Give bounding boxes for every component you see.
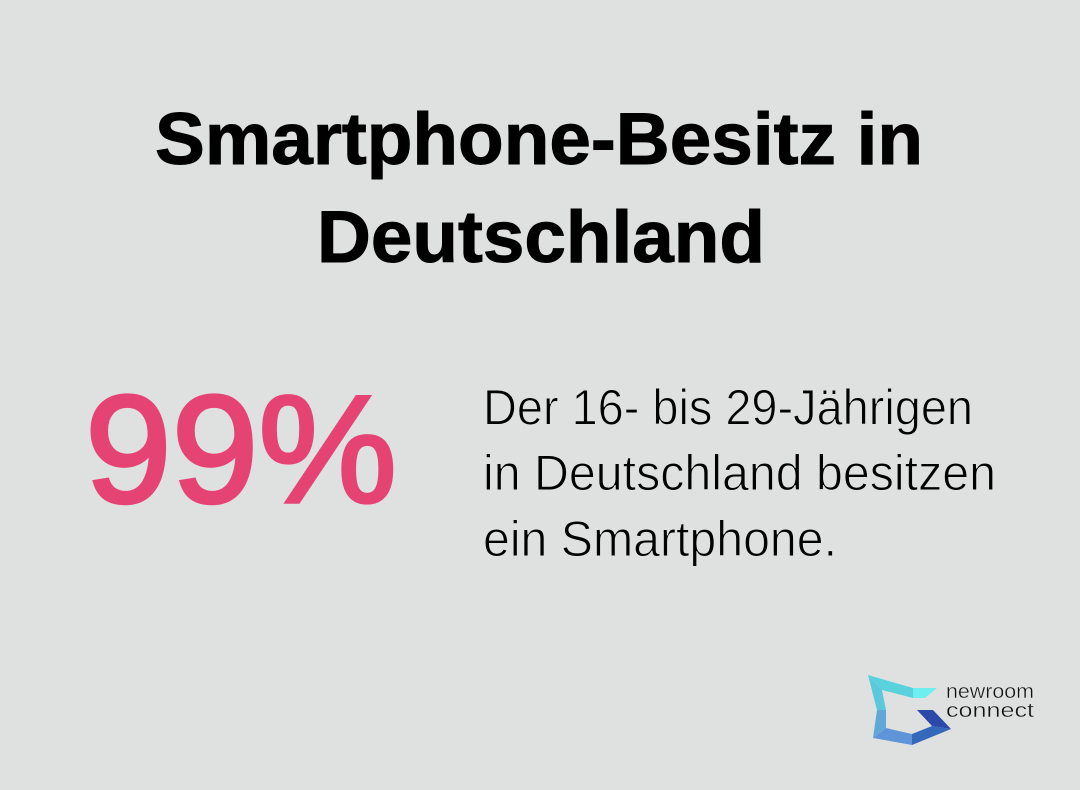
logo: newroom connect	[868, 675, 1035, 745]
title: Smartphone-Besitz in	[155, 99, 923, 180]
title: Deutschland	[317, 197, 765, 278]
title	[155, 99, 923, 278]
description text	[483, 378, 996, 567]
description text: Der 16- bis 29-Jährigen	[483, 378, 973, 436]
logo: newroom connect: newroom	[946, 681, 1034, 703]
description text: ein Smartphone.	[483, 510, 837, 567]
logo: newroom connect: connect	[946, 700, 1035, 722]
big statistic: 99%: 99%	[85, 364, 397, 535]
description text: in Deutschland besitzen	[483, 444, 996, 501]
